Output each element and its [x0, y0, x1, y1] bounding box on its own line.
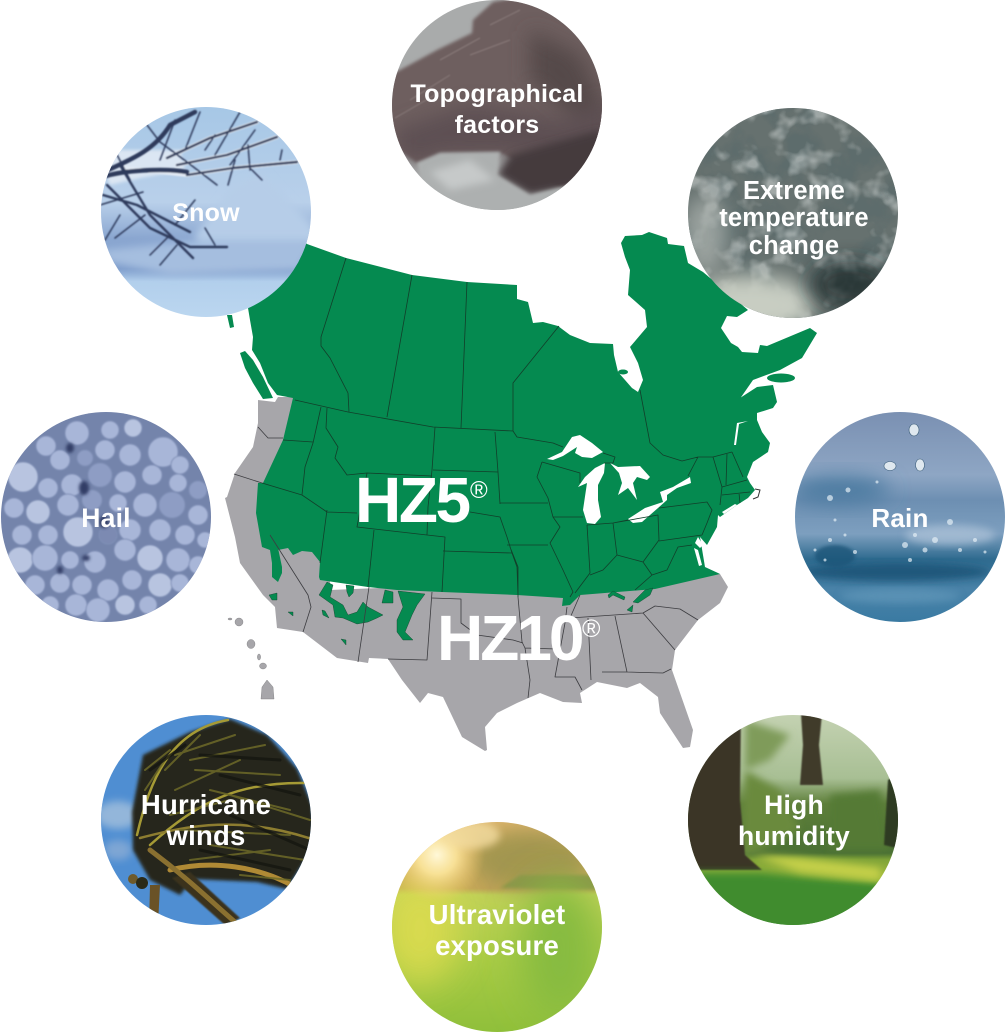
- caption: winds: [166, 820, 245, 851]
- state borders, HZ10: [234, 427, 698, 698]
- label: HZ5: HZ5: [355, 464, 470, 536]
- map of North America with HZ5 and HZ10 zones: [225, 232, 817, 751]
- HZ10 zone: grey US land area: [225, 397, 728, 751]
- Hawaii islands: [228, 618, 274, 699]
- green patches in the south-west and Appalachians: [269, 582, 653, 645]
- Cape Cod hook: [753, 489, 760, 499]
- photo circle: Extreme temperature change: [688, 108, 898, 318]
- photo circle: Topographical factors: [385, 0, 610, 215]
- caption: High: [764, 790, 824, 820]
- caption: Rain: [871, 503, 929, 533]
- islands: [227, 315, 795, 399]
- photo circle: Snow: [100, 106, 320, 320]
- caption: humidity: [738, 821, 850, 851]
- label: HZ10: HZ10: [437, 602, 582, 674]
- photo circle: Hurricane winds: [96, 714, 315, 928]
- state and province borders, HZ5: [262, 258, 750, 597]
- Great Lakes and coastal inlets: [547, 421, 748, 566]
- caption: Hurricane: [141, 789, 271, 820]
- photo circle: Ultraviolet exposure: [392, 822, 602, 1032]
- caption: exposure: [435, 930, 559, 961]
- photo circle: Rain: [790, 412, 1005, 622]
- caption: change: [749, 232, 839, 260]
- photo circle: High humidity: [680, 714, 905, 930]
- caption: Snow: [172, 199, 240, 227]
- caption: temperature: [719, 204, 869, 232]
- label: HZ10: ®: [582, 615, 601, 643]
- caption: Hail: [81, 503, 131, 533]
- HZ5 zone: green Canada and northern US: [240, 232, 817, 606]
- caption: factors: [455, 111, 539, 139]
- label: HZ5: ®: [470, 477, 488, 504]
- caption: Topographical: [411, 80, 583, 108]
- photo circle: Hail: [0, 410, 214, 624]
- caption: Extreme: [743, 177, 845, 205]
- caption: Ultraviolet: [429, 899, 565, 930]
